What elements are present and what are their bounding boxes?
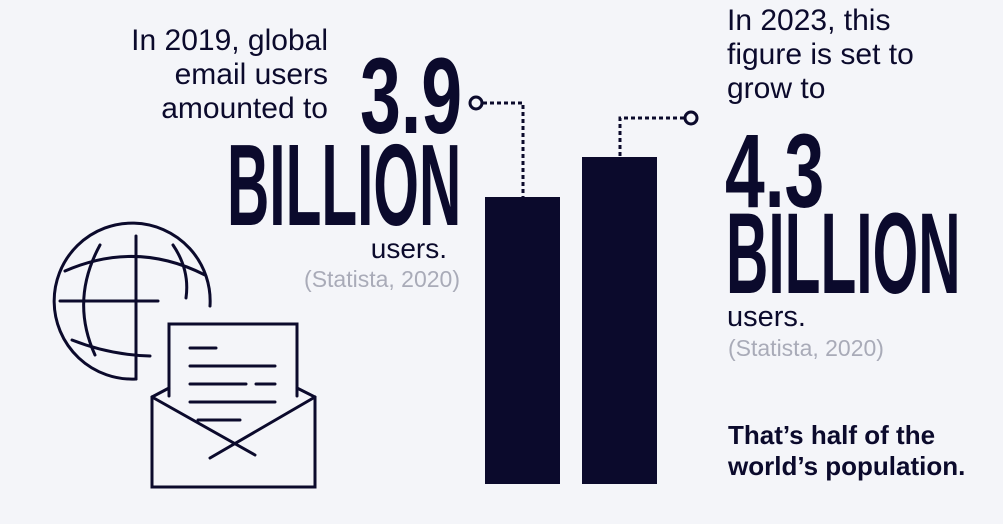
connector right (620, 112, 697, 157)
text: 2023 intro: grow to (727, 72, 825, 105)
icon: globe and envelope (52, 222, 317, 488)
callout: half of world (728, 420, 965, 481)
text: 2023 intro (727, 4, 914, 105)
number: BILLION right: BILLION (726, 190, 961, 318)
source left: (Statista, 2020) (304, 266, 460, 292)
text: 2023 intro: figure is set to (727, 38, 914, 71)
text: 2019 intro (131, 24, 328, 125)
text: users right: users. (727, 301, 806, 333)
text: 2019 intro: amounted to (161, 92, 328, 125)
text: 2019 intro: email users (175, 58, 328, 91)
envelope with letter (152, 324, 315, 487)
text: users left: users. (371, 233, 447, 264)
text: 2019 intro: In 2019, global (131, 24, 328, 57)
text: 2023 intro: In 2023, this (727, 4, 890, 37)
callout: half of world: world’s population. (728, 451, 965, 481)
bar 2019 (485, 197, 560, 484)
number: 4.3: 4.3 (725, 113, 824, 230)
callout: half of world: That’s half of the (728, 420, 935, 450)
number: 3.9: 3.9 (360, 35, 462, 156)
source right: (Statista, 2020) (728, 335, 884, 361)
bar 2023 (582, 157, 657, 484)
globe (54, 223, 210, 379)
number: BILLION left: BILLION (227, 120, 461, 250)
connector left (470, 97, 523, 197)
